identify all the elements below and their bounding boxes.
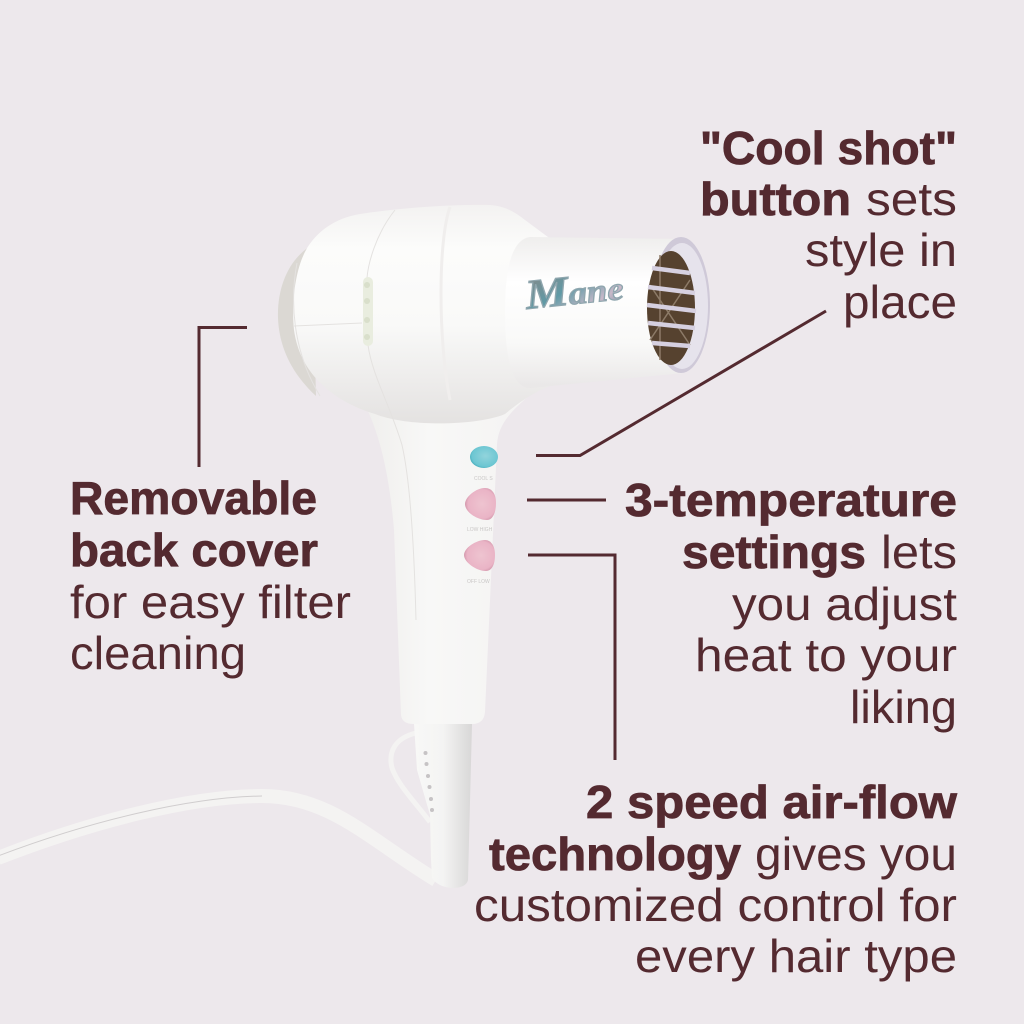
cord strain relief with loop xyxy=(391,724,472,888)
label: OFF LOW xyxy=(467,579,490,585)
text: air-flow technology: 2 speed air-flow xyxy=(586,776,957,828)
text: cool shot button: style in xyxy=(805,224,957,276)
barrel xyxy=(505,237,684,388)
handle xyxy=(362,395,530,724)
text: temperature settings: you adjust xyxy=(732,578,957,630)
nozzle opening xyxy=(647,251,695,365)
text: temperature settings: 3-temperature xyxy=(625,474,957,526)
vent holes xyxy=(424,751,434,812)
text: air-flow technology xyxy=(474,776,957,982)
text: cool shot button: sets xyxy=(866,173,957,225)
text: temperature settings: heat to your xyxy=(695,629,957,681)
leader line: back cover xyxy=(199,328,247,467)
text: removable back cover: Removable xyxy=(70,472,317,524)
leader line: air flow xyxy=(528,555,615,760)
hair dryer product illustration xyxy=(0,205,710,888)
text: removable back cover: for easy filter xyxy=(70,576,351,628)
leader line: temperature xyxy=(527,498,606,502)
text: temperature settings: liking xyxy=(850,681,957,733)
text: cool shot button: button xyxy=(700,173,851,225)
brand logo: Mane xyxy=(522,263,626,319)
text: removable back cover xyxy=(70,472,351,679)
text: air-flow technology: customized control for xyxy=(474,879,957,931)
leader line: cool shot xyxy=(536,311,826,456)
body seams xyxy=(294,207,450,620)
infographic canvas xyxy=(0,130,958,982)
label: COOL SHOT xyxy=(474,476,503,482)
nozzle xyxy=(647,237,710,373)
text: cool shot button: "Cool shot" xyxy=(700,122,957,174)
text: cool shot button xyxy=(700,122,957,328)
text: air-flow technology: every hair type xyxy=(635,930,957,982)
text: air-flow technology: technology xyxy=(489,828,741,880)
text: removable back cover: back cover xyxy=(70,524,318,576)
label: LOW HIGH xyxy=(467,527,493,533)
speed button xyxy=(464,540,495,585)
text: temperature settings: lets xyxy=(881,526,957,578)
cool shot button xyxy=(470,446,498,480)
back cover latch xyxy=(363,277,373,346)
internal struts xyxy=(650,255,690,360)
text: cool shot button: place xyxy=(843,276,957,328)
text: removable back cover: cleaning xyxy=(70,627,246,679)
text: temperature settings xyxy=(625,474,957,733)
text: air-flow technology: gives you xyxy=(755,828,957,880)
main body xyxy=(293,205,552,423)
grille bars xyxy=(647,268,696,346)
text: temperature settings: settings xyxy=(682,526,866,578)
temperature button xyxy=(465,488,496,533)
back cover xyxy=(278,245,316,396)
power cord xyxy=(0,796,436,880)
